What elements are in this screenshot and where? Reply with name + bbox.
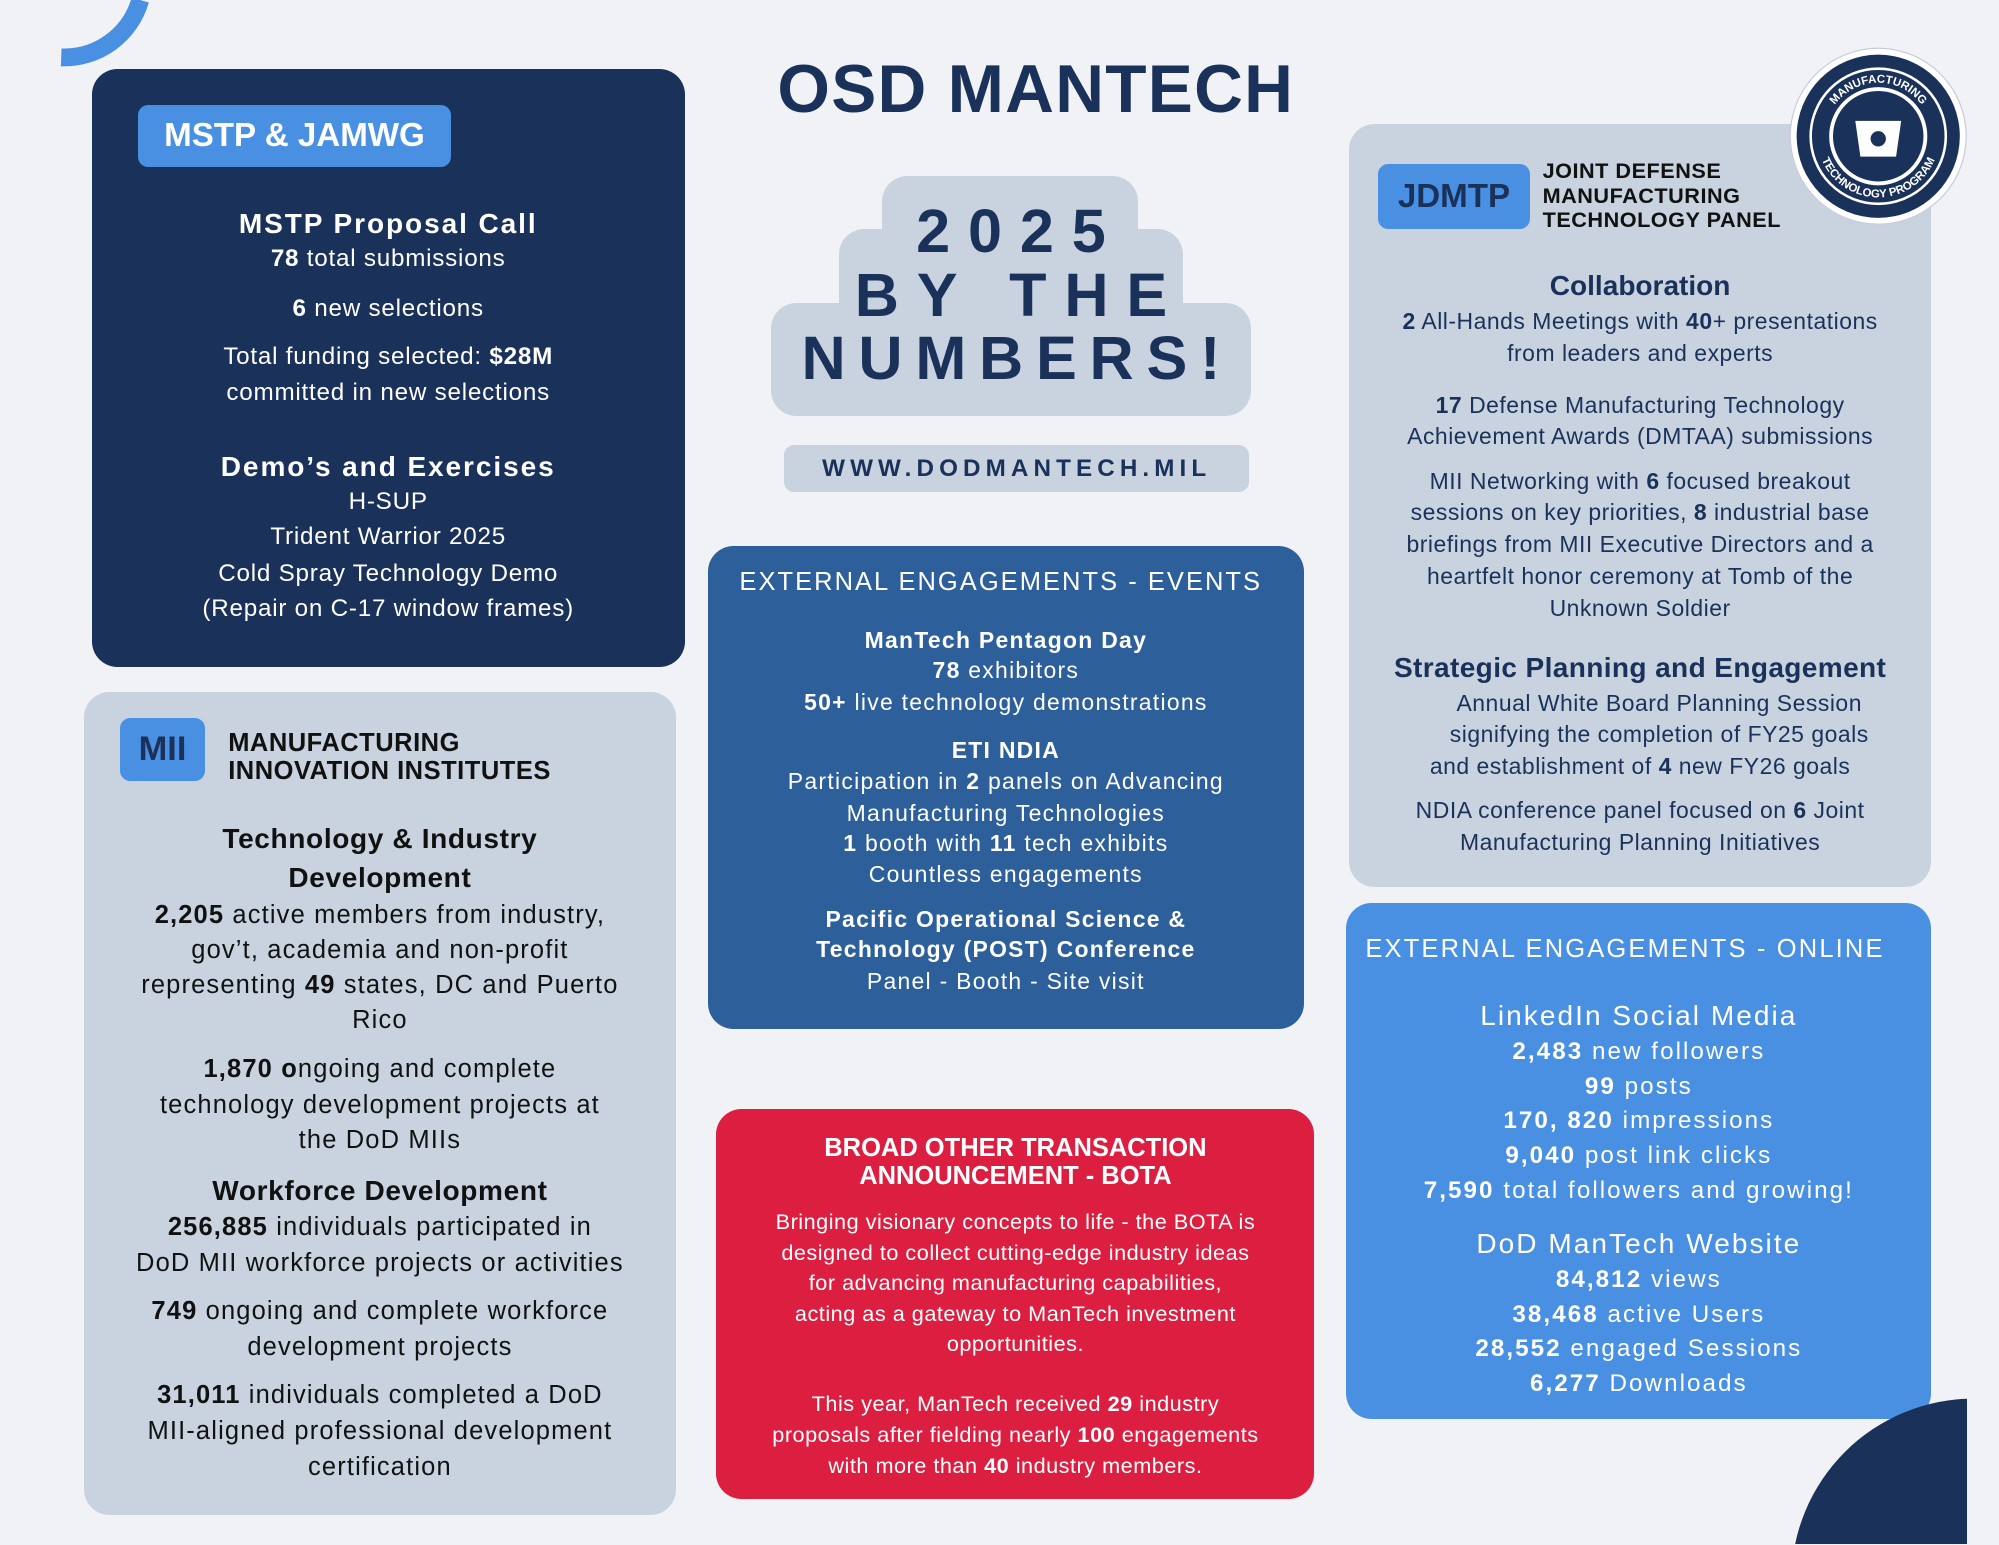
text: pentagon day: 50+ live technology demonstrations — [804, 689, 1208, 715]
text: collaboration items: Unknown Soldier — [1550, 595, 1731, 621]
tag: MII: MII — [139, 730, 186, 768]
decorative arc top-left — [60, 0, 149, 66]
panel: JDMTP — [1349, 124, 1931, 887]
text: collaboration items: heartfelt honor ceremony at Tomb of the — [1427, 563, 1853, 589]
text: ETI NDIA: Manufacturing Technologies — [847, 800, 1165, 826]
text: BOTA description: This year, ManTech received 29 industry — [812, 1391, 1219, 1416]
decorative quarter circle bottom-right — [1795, 1398, 1967, 1544]
text: website stats: 28,552 engaged Sessions — [1475, 1335, 1802, 1362]
tag: MII — [120, 718, 205, 781]
text: pentagon day: ManTech Pentagon Day — [865, 626, 1147, 652]
heading: Demo's and Exercises: Demo’s and Exercises — [221, 451, 556, 482]
text: BOTA description: opportunities. — [947, 1331, 1084, 1356]
text: POST conference — [816, 906, 1196, 994]
text: tech stats — [141, 901, 619, 1154]
text: workforce stats — [136, 1213, 624, 1481]
panel: external engagements online — [1346, 903, 1931, 1419]
heading: technology & industry development: Technology & Industry — [222, 823, 537, 854]
icon: ManTech logo seal: MANUFACTURING — [1829, 74, 1926, 104]
text: ETI NDIA: 1 booth with 11 tech exhibits — [843, 830, 1168, 856]
label: manufacturing innovation institutes: MANUFACTURING — [228, 729, 460, 757]
text: demos list: (Repair on C-17 window frames) — [202, 595, 574, 622]
text: workforce stats: 256,885 individuals participated in — [168, 1213, 592, 1241]
text: BOTA description: Bringing visionary concepts to life - the BOTA is — [776, 1209, 1255, 1234]
text: collaboration items — [1402, 308, 1878, 621]
text: MSTP stats: committed in new selections — [226, 379, 550, 406]
text: workforce stats: development projects — [247, 1333, 512, 1361]
text: MSTP stats: 78 total submissions — [271, 245, 506, 272]
heading: strategic planning: Strategic Planning and Engagement — [1394, 652, 1886, 683]
heading: collaboration: Collaboration — [1550, 270, 1730, 301]
text: collaboration items: sessions on key priorities, 8 industrial base — [1411, 499, 1870, 525]
url pill — [784, 445, 1249, 492]
tag: JDMTP — [1378, 164, 1530, 229]
text: tech stats: 2,205 active members from industry, — [155, 901, 605, 929]
text: workforce stats: DoD MII workforce projects or activities — [136, 1249, 624, 1277]
text: linkedin stats — [1424, 1000, 1854, 1204]
text: collaboration items: Achievement Awards (DMTAA) submissions — [1407, 423, 1873, 449]
text: demos list: H-SUP — [349, 488, 428, 515]
heading: workforce development: Workforce Development — [212, 1175, 548, 1206]
text: ETI NDIA: ETI NDIA — [952, 737, 1060, 763]
badge: 2025 by the numbers — [771, 176, 1251, 416]
text: strategic items: Manufacturing Planning Initiatives — [1460, 829, 1820, 855]
text: tech stats: the DoD MIIs — [299, 1126, 461, 1154]
heading: BOTA — [824, 1134, 1207, 1190]
text: collaboration items: from leaders and experts — [1507, 340, 1773, 366]
label: manufacturing innovation institutes — [228, 729, 551, 785]
text: linkedin stats: LinkedIn Social Media — [1480, 1000, 1797, 1031]
text: POST conference: Technology (POST) Conference — [816, 936, 1196, 962]
label: joint defense manufacturing technology panel: TECHNOLOGY PANEL — [1543, 207, 1781, 232]
panel: external engagements events — [708, 546, 1304, 1029]
text: linkedin stats: 2,483 new followers — [1512, 1038, 1765, 1065]
text: strategic items: NDIA conference panel focused on 6 Joint — [1416, 797, 1865, 823]
text: MSTP stats: Total funding selected: $28M — [223, 343, 553, 370]
heading: BOTA: ANNOUNCEMENT - BOTA — [859, 1162, 1172, 1190]
text: POST conference: Panel - Booth - Site visit — [867, 968, 1145, 994]
text: collaboration items: 2 All-Hands Meetings with 40+ presentations — [1402, 308, 1878, 334]
text: BOTA description: for advancing manufacturing capabilities, — [809, 1270, 1222, 1295]
heading: MSTP Proposal Call: MSTP Proposal Call — [239, 208, 538, 239]
text: ETI NDIA: Participation in 2 panels on Advancing — [788, 768, 1224, 794]
badge: 2025 by the numbers: BY THE — [855, 261, 1185, 329]
text: website stats: DoD ManTech Website — [1476, 1228, 1801, 1259]
label: joint defense manufacturing technology panel: JOINT DEFENSE — [1543, 158, 1721, 183]
tag: JDMTP: JDMTP — [1398, 178, 1510, 215]
text: website stats: 84,812 views — [1556, 1266, 1722, 1293]
text: collaboration items: briefings from MII Executive Directors and a — [1406, 531, 1874, 557]
text: pentagon day — [804, 626, 1208, 715]
text: demos list — [202, 488, 574, 622]
tag: MSTP & JAMWG: MSTP & JAMWG — [164, 117, 425, 154]
text: ETI NDIA — [788, 737, 1224, 887]
text: strategic items: Annual White Board Planning Session — [1456, 690, 1862, 716]
text: tech stats: representing 49 states, DC and Puerto — [141, 971, 619, 999]
label: joint defense manufacturing technology panel: MANUFACTURING — [1543, 183, 1740, 208]
text: workforce stats: MII-aligned professional development — [147, 1417, 612, 1445]
label: joint defense manufacturing technology panel — [1542, 158, 1781, 232]
label: manufacturing innovation institutes: INNOVATION INSTITUTES — [228, 757, 551, 785]
text: BOTA description: acting as a gateway to ManTech investment — [795, 1301, 1236, 1326]
text: tech stats: 1,870 ongoing and complete — [203, 1055, 556, 1083]
text: BOTA description: proposals after fielding nearly 100 engagements — [772, 1422, 1259, 1447]
text: website stats — [1475, 1228, 1802, 1397]
text: strategic items: and establishment of 4 new FY26 goals — [1430, 753, 1850, 779]
panel: MSTP & JAMWG — [92, 69, 685, 667]
text: tech stats: technology development projects at — [160, 1091, 600, 1119]
text: linkedin stats: 170, 820 impressions — [1503, 1107, 1774, 1134]
text: collaboration items: MII Networking with 6 focused breakout — [1430, 468, 1851, 494]
text: linkedin stats: 7,590 total followers and growing! — [1424, 1177, 1854, 1204]
text: pentagon day: 78 exhibitors — [933, 657, 1079, 683]
text: POST conference: Pacific Operational Science & — [825, 906, 1186, 932]
panel: BOTA — [716, 1109, 1314, 1499]
text: MSTP stats — [223, 245, 553, 406]
panel: MII — [84, 692, 676, 1515]
text: demos list: Cold Spray Technology Demo — [218, 560, 558, 587]
panel: MII: certification — [308, 1453, 452, 1481]
text: MSTP stats: 6 new selections — [293, 295, 484, 322]
heading: online: EXTERNAL ENGAGEMENTS - ONLINE — [1365, 935, 1885, 963]
title: OSD MANTECH — [777, 52, 1294, 127]
text: workforce stats: 31,011 individuals completed a DoD — [157, 1381, 603, 1409]
badge: 2025 by the numbers: NUMBERS! — [801, 324, 1233, 392]
text: BOTA description: designed to collect cutting-edge industry ideas — [781, 1240, 1250, 1265]
tag: MSTP & JAMWG — [138, 105, 451, 167]
text: strategic items: signifying the completion of FY25 goals — [1450, 721, 1869, 747]
icon: ManTech logo seal: TECHNOLOGY PROGRAM — [1822, 156, 1935, 198]
text: linkedin stats: 99 posts — [1585, 1073, 1693, 1100]
text: linkedin stats: 9,040 post link clicks — [1505, 1142, 1772, 1169]
text: workforce stats: 749 ongoing and complete workforce — [151, 1297, 608, 1325]
text: BOTA description: with more than 40 industry members. — [828, 1453, 1202, 1478]
heading: technology & industry development — [222, 823, 537, 893]
heading: events: EXTERNAL ENGAGEMENTS - EVENTS — [739, 568, 1262, 596]
badge: 2025 by the numbers: 2025 — [916, 197, 1124, 265]
text: website stats: 38,468 active Users — [1512, 1301, 1765, 1328]
url pill: WWW.DODMANTECH.MIL — [822, 454, 1211, 482]
text: tech stats: gov’t, academia and non-profit — [191, 936, 569, 964]
text: tech stats: Rico — [352, 1006, 408, 1034]
text: BOTA description — [772, 1209, 1259, 1478]
text: collaboration items: 17 Defense Manufacturing Technology — [1436, 392, 1845, 418]
heading: technology & industry development: Development — [288, 862, 471, 893]
text: demos list: Trident Warrior 2025 — [270, 523, 506, 550]
text: strategic items — [1416, 690, 1869, 855]
heading: BOTA: BROAD OTHER TRANSACTION — [824, 1134, 1207, 1162]
icon: ManTech logo seal — [1790, 48, 1967, 224]
text: ETI NDIA: Countless engagements — [869, 861, 1143, 887]
text: website stats: 6,277 Downloads — [1530, 1370, 1748, 1397]
